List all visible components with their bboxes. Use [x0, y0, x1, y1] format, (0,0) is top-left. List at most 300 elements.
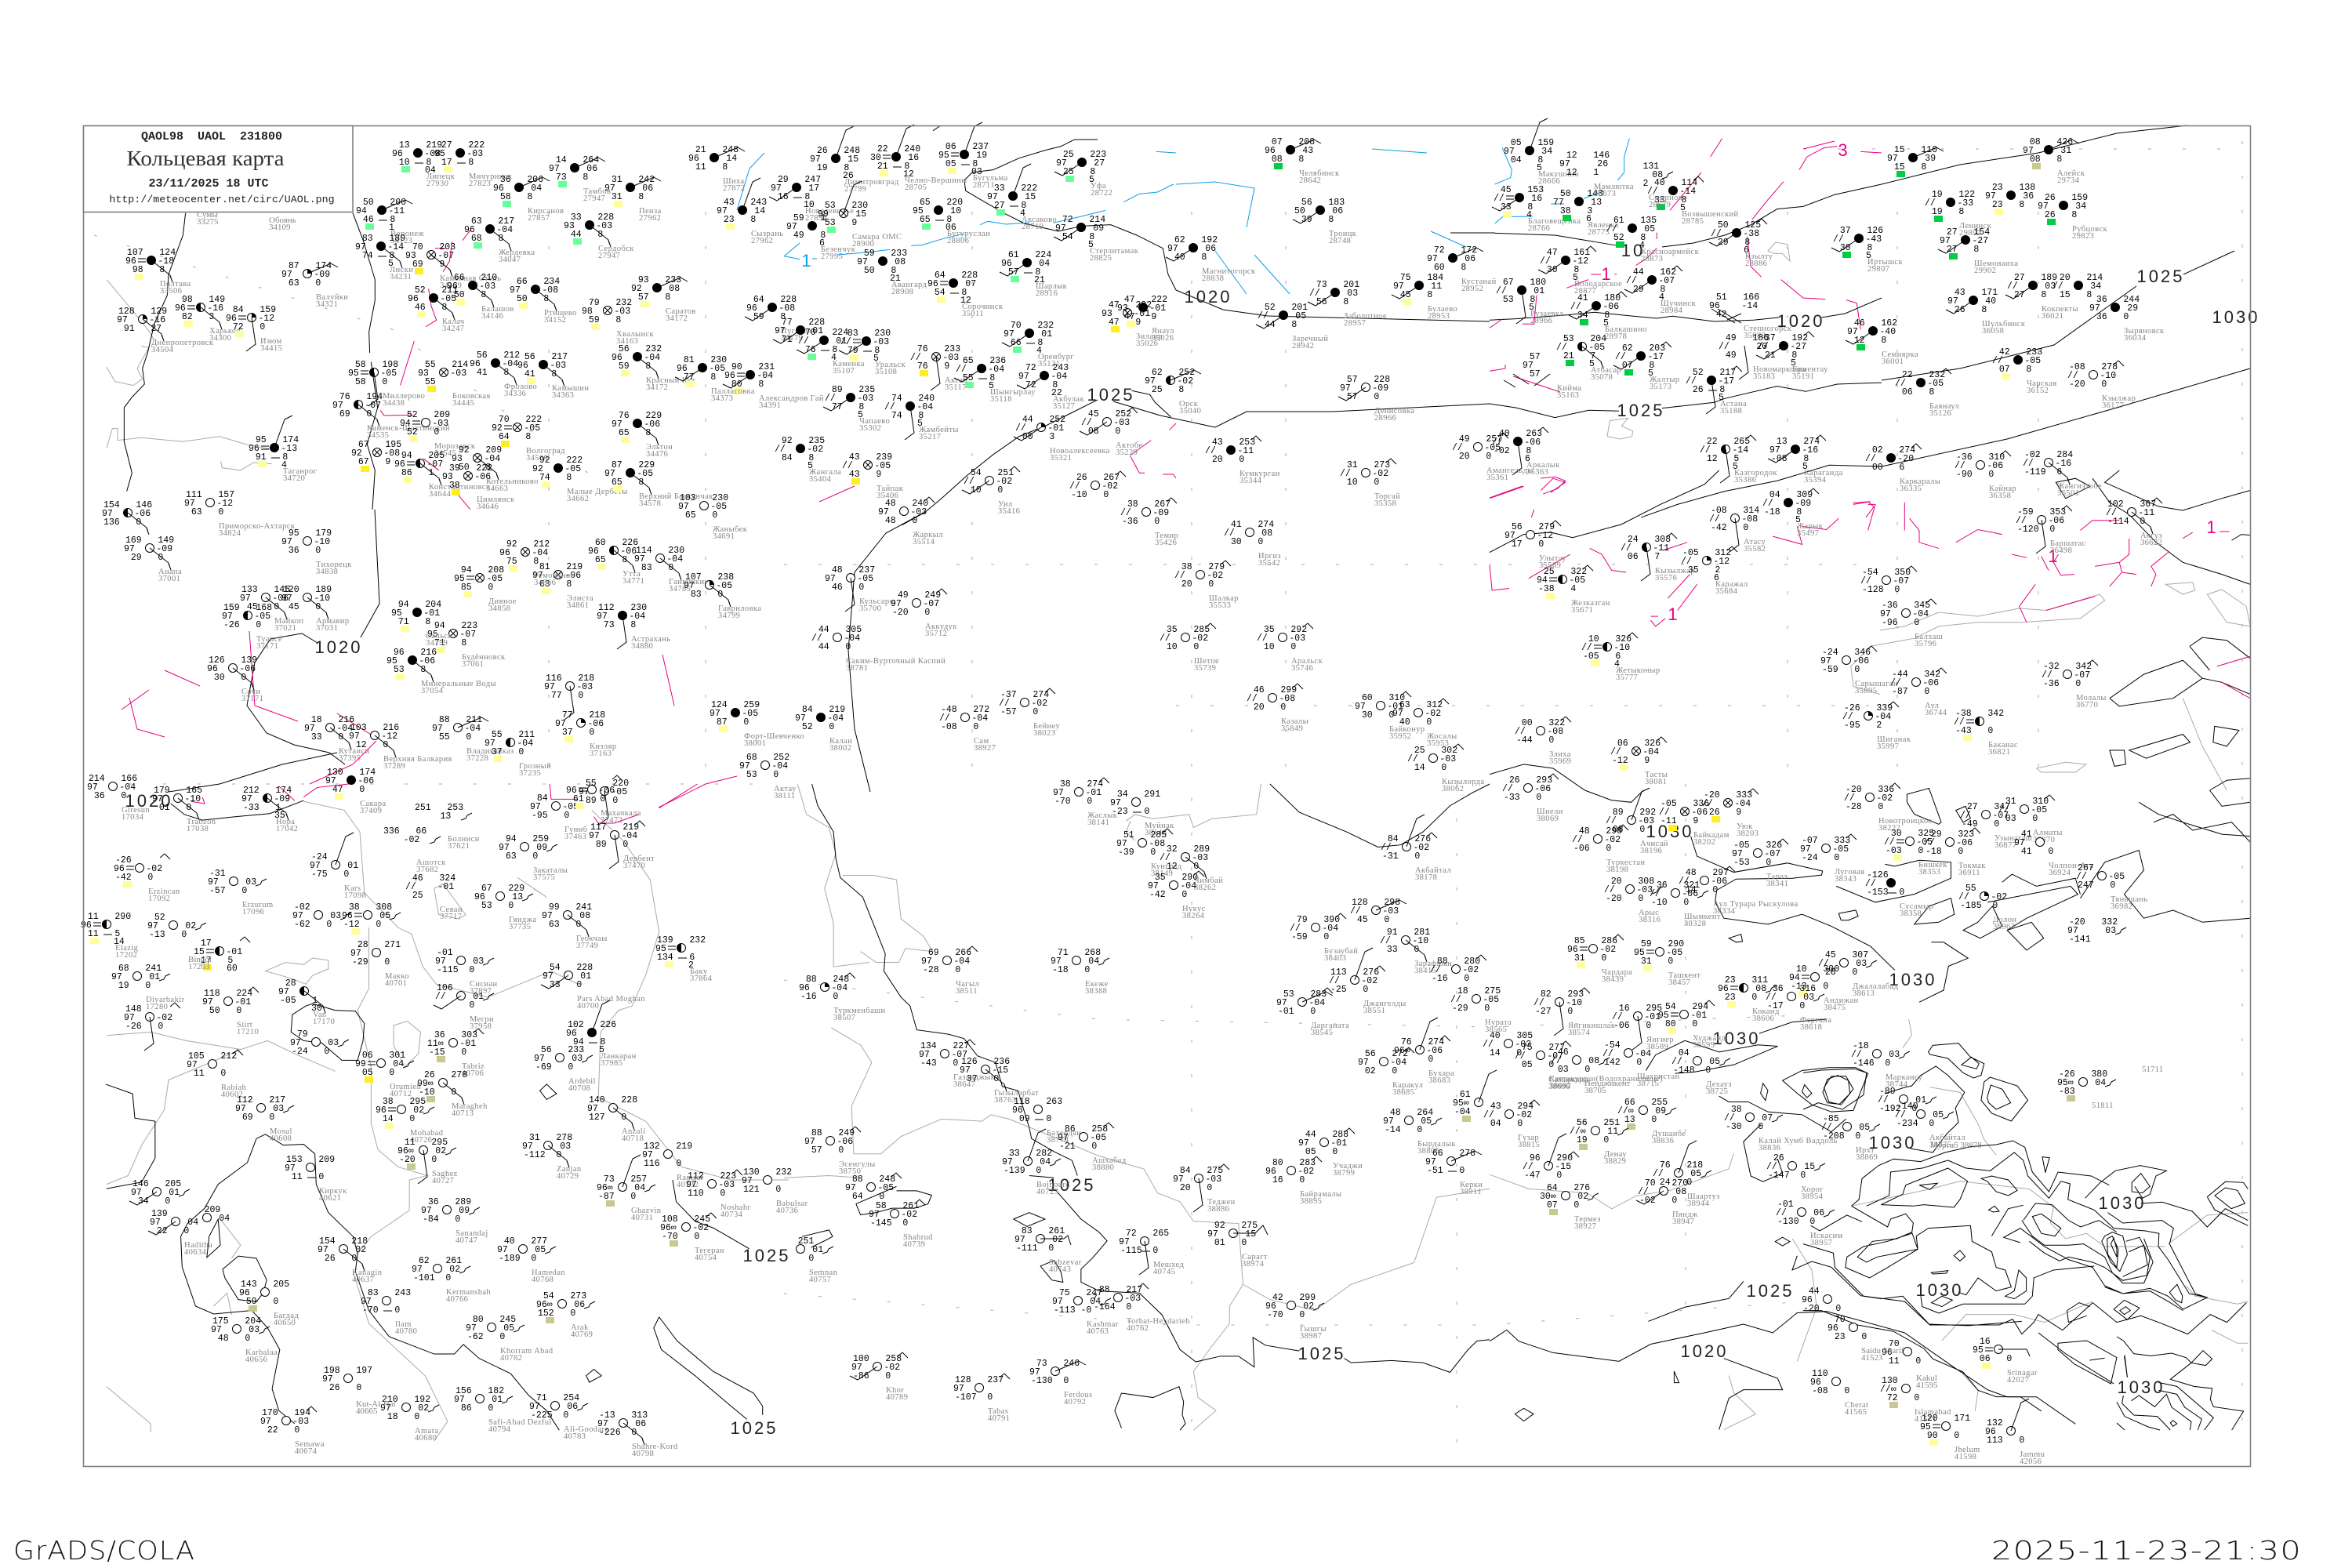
Изюм: Изюм	[260, 337, 282, 346]
Троицк: Троицк	[1329, 230, 1357, 238]
Тараз: 97 -07	[1732, 849, 1780, 859]
Байрамалы: 38895	[1300, 1197, 1322, 1206]
Рузаевка	[1496, 278, 1563, 325]
Шымкент: -10 0	[1651, 898, 1689, 908]
Туапсе: 97 -05	[222, 612, 270, 622]
Ертис: Ленинск	[1959, 222, 1992, 230]
Морозовск: 52 209	[401, 410, 450, 420]
Форт-Шевченко: 38001	[744, 739, 766, 748]
Байкадам: -05 336	[1661, 799, 1709, 809]
Зилаир: 47 9	[1103, 318, 1141, 328]
Ахалцихе: 336 66	[383, 826, 426, 837]
Казгородок	[1700, 435, 1777, 485]
Кизляр 2: 37163	[590, 750, 612, 758]
Pars Abad Moghan	[541, 963, 645, 1011]
Шынгырлау: // -04	[956, 365, 1004, 375]
Таганрог: 95 174	[250, 435, 299, 445]
Фергана	[1766, 984, 1831, 1032]
Иргиз: 35542	[1258, 559, 1280, 568]
Ghazvin: -87 0	[598, 1192, 636, 1202]
Ащысай: Шетпе	[1194, 657, 1219, 666]
Дивное: 34858	[488, 604, 510, 613]
Геокчаы: 37749	[576, 942, 598, 950]
Аркалык: 35363	[1526, 468, 1548, 477]
Rabiah: 11 0	[188, 1069, 226, 1079]
Чагыл: 97 -04	[921, 956, 970, 967]
Каттакурган: 05 0	[1516, 1060, 1554, 1070]
Жарык: // -09	[1762, 499, 1811, 509]
Яна-Сай: 57 228	[1341, 375, 1390, 385]
Ерментау: 5	[1791, 358, 1796, 368]
isotherm and isobar value labels: 1020	[1777, 311, 1824, 331]
Нурата: // -03	[1483, 1040, 1531, 1050]
Макко: 97	[350, 949, 361, 959]
Туапсе: -26 0	[223, 620, 261, 630]
Кулунда: 23 8	[1987, 200, 2024, 210]
Бакты: 22 232	[1896, 370, 1945, 380]
Pars Abad Moghan: Pars Abad Moghan	[577, 995, 645, 1004]
Жезказган	[1537, 565, 1610, 615]
Пенджикент: 41595	[1916, 1381, 1938, 1390]
Чимбай: Чимбай	[1194, 877, 1223, 885]
Жалтыр: 07 8	[1617, 361, 1654, 371]
Эсенгулы: Эсенгулы	[839, 1160, 876, 1169]
isotherm and isobar value labels: 1025	[1617, 401, 1664, 420]
Kermanshah	[412, 1256, 491, 1304]
Кызылжар: // -11	[1621, 543, 1669, 554]
Семей	[1938, 227, 2018, 275]
Кирсанов: 96 04	[493, 183, 542, 194]
Новоалексеевка: 35321	[1050, 454, 1072, 463]
Jhelum	[1920, 1414, 1980, 1461]
Сисиан: -115 0	[437, 965, 474, 975]
Магнитогорск: Магнитогорск	[1202, 267, 1256, 276]
Khor: 100 258	[853, 1354, 902, 1364]
Гюмри: 96 05	[342, 911, 390, 921]
Шар 2: 36501	[2057, 489, 2079, 498]
Туапсе: 159 168	[223, 603, 272, 613]
Ганюшкино: 97 -05	[678, 502, 727, 512]
Морозовск: Морозовск	[434, 442, 476, 451]
Джангелды: 113 276	[1330, 967, 1379, 978]
Каменск-Шахтинский: 34535	[367, 431, 389, 440]
Яна-Сай: 28966	[1374, 414, 1396, 423]
Красноармейск: // 05	[1606, 224, 1655, 234]
isotherm and isobar value labels: 1	[1601, 264, 1613, 284]
Сусамыр: 38358	[1900, 909, 1922, 918]
Изюм: 96 -12	[226, 314, 274, 324]
Дехауз: -148 0	[1673, 1065, 1711, 1076]
Jhelum: 90 0	[1922, 1431, 1959, 1441]
Hopa: 17042	[276, 825, 298, 833]
Утта: 60 226	[590, 538, 638, 548]
Зарафшан: // -10	[1380, 936, 1428, 946]
Pars Abad Moghan: 33 0	[544, 980, 582, 990]
Саратов: 92 08	[631, 284, 680, 294]
Жалтыр: 5	[1648, 368, 1653, 379]
Зайсан: 15 8	[2054, 290, 2092, 300]
Екеже: Екеже	[1085, 980, 1109, 989]
Валуйки: 87 174	[283, 261, 332, 271]
Заболотное: 56 8	[1311, 297, 1348, 307]
Torbat-Heydarieh: -164 0	[1094, 1302, 1131, 1312]
Красный Кут: 59 8	[613, 361, 651, 372]
Semnan: 251	[776, 1236, 814, 1247]
Гузар: Гузар	[1518, 1134, 1539, 1142]
Константиновск: 94 205	[396, 451, 445, 461]
Ейск: 154 146	[103, 500, 152, 510]
Сусамыр: //	[1865, 879, 1876, 889]
Акбулак: 97 -04	[1018, 372, 1067, 382]
Лиски: 83 189	[357, 234, 405, 244]
Магнитогорск: 62 192	[1169, 235, 1218, 245]
Сарышаган	[1820, 646, 1898, 695]
Кустанай: 97 06	[1427, 254, 1475, 264]
Шиели: 38069	[1537, 815, 1559, 823]
Щучинск	[1624, 266, 1697, 315]
Жангала: 5	[808, 461, 813, 471]
Кирсанов: 36 206	[495, 175, 543, 185]
Узынагаш	[1960, 802, 2032, 850]
Димитровград: 97 15	[810, 154, 858, 165]
Эсенгулы: 38750	[839, 1167, 861, 1176]
Фергана: Фергана	[1800, 1016, 1831, 1025]
Аральск: 10 0	[1258, 642, 1296, 652]
Cizre: 79	[292, 1029, 308, 1040]
Балкашино: 28978	[1605, 332, 1627, 341]
Mohabad: 38 295	[377, 1097, 426, 1107]
Долон	[1958, 884, 2016, 931]
Дехауз: 04	[1673, 1048, 1690, 1058]
Diyarbakir: 17280	[146, 1003, 168, 1011]
Шарлык: Шарлык	[1036, 282, 1068, 291]
Степное: 36001	[1882, 358, 1904, 366]
Сызрань: Сызрань	[751, 230, 783, 238]
Пенза	[604, 175, 662, 223]
Новомарковка: 49	[1720, 350, 1737, 361]
Щучинск: 28984	[1661, 307, 1683, 315]
Шиганак: -95 2	[1844, 720, 1882, 731]
Душанбе: 66 255	[1619, 1098, 1668, 1108]
Пенза: Пенза	[639, 207, 662, 216]
Babulsar	[742, 1167, 808, 1215]
Orumieh: Orumieh	[390, 1083, 421, 1091]
isotherm lines (magenta)	[122, 139, 2250, 823]
Гурджаани: 94 259	[500, 834, 549, 844]
Обоянь, Сумы: Обоянь	[269, 216, 296, 225]
Термез: 07 0	[1541, 1200, 1579, 1210]
Теджен: Теджен	[1207, 1198, 1236, 1207]
Челябинск: 96 43	[1265, 146, 1313, 156]
Ланкаран: 37985	[601, 1059, 622, 1068]
Алматы: 03 0	[2000, 814, 2038, 824]
Ташкент	[1634, 939, 1700, 987]
Уюк	[1702, 789, 1759, 838]
Ardebil: 97 03	[534, 1054, 583, 1064]
Муйнак: 97	[1110, 798, 1121, 808]
Жамбейты: 5	[917, 419, 923, 429]
Полтава: 33506	[160, 287, 182, 296]
Аксай: 35117	[945, 383, 967, 392]
Фролово	[470, 350, 537, 398]
Сальск: Сальск	[426, 632, 452, 641]
Hopa: 212 174	[243, 786, 292, 796]
Шиганак	[1842, 702, 1911, 751]
Троицк: 39 8	[1296, 215, 1334, 225]
Шымкент: // -06	[1650, 889, 1698, 899]
Бухара	[1394, 1018, 1454, 1085]
Самара ОМС: Самара ОМС	[852, 233, 902, 241]
Харьков	[175, 295, 241, 343]
Улытау: 35569	[1539, 561, 1561, 570]
Каспий: 44 305	[813, 625, 862, 635]
Чимбай	[1160, 844, 1223, 892]
Бакты	[1895, 368, 1959, 418]
Джангелды: Джангелды	[1363, 1000, 1406, 1008]
Эсенгулы: 57 0	[806, 1145, 844, 1156]
Каменск-Шахтинский: Каменск-Шахтинский	[367, 424, 450, 433]
Maragheh	[417, 1070, 488, 1118]
Володарское: // -12	[1540, 256, 1588, 267]
Изюм	[226, 305, 282, 353]
Бугуруслан: 65 220	[914, 198, 963, 208]
Пенза: 31 8	[606, 192, 644, 202]
Сисиан: 97 03	[435, 956, 484, 967]
Чагыл: 69 266	[923, 948, 971, 958]
Кийма: 97	[1523, 361, 1534, 371]
Jammu: 42056	[2020, 1457, 2042, 1466]
Костанай	[1392, 273, 1457, 321]
Ремонтное: 96 -04	[499, 548, 548, 558]
Красноармейск: 61 135	[1608, 216, 1657, 226]
Токмак: 29 323	[1926, 829, 1974, 840]
Бугульма: 95 19	[938, 151, 987, 161]
Узынагаш: Узынагаш	[1994, 834, 2032, 843]
Чилик: 97	[2014, 838, 2025, 848]
Tabriz: 11∞ -01	[427, 1039, 476, 1049]
Пенза: 97 06	[604, 183, 653, 194]
Худжанд: 95 -01	[1658, 1011, 1707, 1021]
Аул: // -06	[1890, 678, 1939, 688]
Bojnourd: -139 0	[1004, 1166, 1041, 1176]
Anzali: 40718	[622, 1134, 644, 1143]
Гузар: 38815	[1518, 1141, 1540, 1149]
Караганда: 13 274	[1771, 437, 1820, 447]
Астана: 35188	[1720, 407, 1742, 416]
Макушино: Макушино	[1538, 170, 1579, 179]
Haditha	[148, 1209, 212, 1257]
Ахалцихе: 37682	[416, 866, 438, 874]
Аксаково: 33 222	[989, 183, 1037, 194]
Баканас: -38 342	[1955, 709, 2004, 719]
Авангард: 50 8	[858, 266, 896, 276]
Mosul south: 34 0	[132, 1196, 170, 1207]
Георгиевск: Верхняя Балкария	[383, 755, 452, 764]
Кустанай: Кустанай	[1461, 278, 1497, 286]
Tabriz: Tabriz	[462, 1062, 485, 1071]
Noshahr: 110 0	[688, 1189, 725, 1199]
Балкашино: 34 8	[1572, 310, 1610, 321]
Новоалексеевка: 00 3	[1017, 432, 1054, 442]
Тайпак: 35406	[877, 492, 898, 500]
Бакты: Баянаул	[1929, 402, 1959, 411]
Воронеж: 50 200	[358, 198, 406, 208]
Сорочинск	[927, 270, 1004, 318]
Пенджикент: 38705	[1584, 1086, 1606, 1095]
Пяндж: Пяндж	[1672, 1210, 1698, 1219]
Аул	[1890, 668, 1947, 717]
Ali-Goodarz: -225 0	[531, 1410, 568, 1421]
Пенджикент: 38696	[1548, 1082, 1570, 1091]
isotherm and isobar value labels: 3	[1838, 140, 1850, 160]
Siirt: 97 -01	[202, 997, 251, 1007]
Уфа: 5	[1089, 175, 1094, 185]
Cherat: 41565	[1845, 1408, 1867, 1417]
Сальск: 34759	[426, 639, 448, 648]
Рузаевка: 28966	[1530, 317, 1552, 325]
Пенджикент: Kakul	[1916, 1374, 1937, 1383]
Elazig: 17202	[115, 951, 137, 960]
Кунград: 38149	[1151, 869, 1173, 878]
Калай Хумб: Калай Хумб Ваддоль	[1759, 1137, 1838, 1145]
Ferdous: 73 246	[1031, 1359, 1080, 1369]
Ащысай: 35739	[1194, 664, 1216, 673]
Каркаралы: 02 274	[1867, 445, 1915, 456]
Rasht: 40732	[677, 1181, 699, 1189]
Заречный	[1256, 303, 1328, 350]
Чагыл: -28 0	[923, 965, 960, 975]
Уральск: 35108	[875, 368, 897, 376]
header code line: QAOL98 UAOL 231800	[141, 130, 282, 143]
Жетыконыр: Жетыконыр	[1616, 666, 1661, 675]
Arak: 152 0	[538, 1308, 575, 1319]
Днепропетровск: 97 -16	[117, 315, 165, 325]
Краснодар: 37021	[274, 624, 296, 633]
Каражал: // -12	[1681, 557, 1730, 567]
Ртищево: 50 8	[511, 294, 549, 304]
Термез: Термез	[1574, 1215, 1601, 1224]
Заболотное	[1308, 280, 1387, 328]
Шарлык	[1000, 250, 1068, 298]
Новомарковка: Новомарковка	[1753, 365, 1806, 374]
Хвалынск: 59 8	[583, 315, 621, 325]
Баку	[655, 935, 713, 983]
stations: north-west (Ukraine, Don, Volga)	[102, 140, 824, 825]
Noshahr: Noshahr	[720, 1203, 750, 1212]
Грозный: 55 211	[486, 730, 535, 740]
Новотроицкое: Новотроицкое	[1878, 817, 1933, 826]
Екеже: 97 04	[1051, 956, 1099, 967]
Фролово: 56 212	[471, 350, 520, 361]
Tabas: Tabas	[988, 1407, 1008, 1416]
Мешхед: Мешхед	[1153, 1261, 1184, 1269]
Новотроицкое: -28 0	[1846, 802, 1883, 812]
Zanjan	[522, 1133, 582, 1181]
Армавир: 45 0	[283, 602, 321, 612]
Муйнак: 38146	[1145, 829, 1167, 837]
Бабиево: 30 0	[1356, 710, 1394, 720]
Ardebil: Ardebil	[568, 1077, 596, 1086]
Hopa: 97 -09	[241, 794, 290, 804]
Жетыконыр: // -10	[1581, 643, 1630, 653]
Mohabad: Mohabad	[410, 1129, 444, 1138]
Макушино: 05 159	[1505, 138, 1554, 148]
Ferdous	[1029, 1359, 1093, 1406]
Аул: -44 342	[1892, 670, 1940, 680]
Каспий	[811, 625, 946, 673]
Янаул: 35026	[1152, 334, 1174, 343]
Косшагыл	[891, 589, 957, 638]
Амангельды	[1452, 433, 1534, 482]
Srinagar: 42027	[2007, 1376, 2029, 1385]
Жамбейты: Жамбейты	[919, 426, 959, 434]
Янгиер: -06 0	[1613, 1021, 1651, 1031]
Маркансу: -18	[1853, 1041, 1869, 1051]
Новоалексеевка: 44 252	[1017, 415, 1065, 425]
Пролетарск: 67 9	[353, 457, 390, 467]
Фергана: // 03	[1766, 993, 1814, 1003]
Самара ОМС	[818, 181, 902, 249]
Diyarbakir: Diyarbakir	[146, 996, 185, 1004]
Душанбе: 13 0	[1619, 1115, 1657, 1125]
Уил: 35416	[998, 507, 1020, 516]
Екеже: -18 0	[1052, 965, 1090, 975]
Rasht: 132 219	[644, 1142, 692, 1152]
Пяндж: 38947	[1672, 1218, 1694, 1226]
Gorgan: 97 -05	[845, 1183, 894, 1193]
Атасу: // -08	[1709, 514, 1758, 524]
Ганюшкино: 103 230	[680, 493, 728, 503]
Красноармейск: 4	[1639, 241, 1645, 251]
Тасты: Тасты	[1645, 771, 1668, 779]
Кзылту: Кзылту	[1745, 252, 1773, 261]
Гышгы: 42 299	[1267, 1293, 1316, 1303]
Ахурян: 97 03	[292, 911, 341, 921]
Khor: -86 0	[853, 1371, 891, 1381]
Ташкент: 38457	[1668, 978, 1690, 987]
Акбайтал 38178	[1381, 815, 1451, 882]
Elazig: 11 5	[82, 929, 120, 939]
Шынгырлау: 5	[989, 381, 994, 391]
Тасты: // -04	[1610, 747, 1659, 757]
Актобе: Актобе	[1116, 441, 1143, 450]
Сам: -48 272	[941, 705, 989, 715]
Зыряновск: Зыряновск	[2124, 327, 2165, 336]
Saghez: 96∞ 02	[397, 1146, 446, 1156]
Актобе: 35229	[1116, 448, 1138, 457]
Полтава: 96 -18	[125, 256, 174, 267]
Каркаралы	[1865, 444, 1940, 493]
Noshahr: 40734	[720, 1210, 743, 1219]
Зыряновск: 36034	[2124, 334, 2147, 343]
Бишкек: -03 0	[1886, 846, 1923, 856]
Волгоград: 70 222	[493, 415, 542, 425]
stations: north-east (Kazakhstan north)	[1492, 118, 2165, 538]
Ганюшкино 2: 97 -04	[634, 554, 683, 564]
Искасим: Искасим	[1810, 1232, 1843, 1240]
Шаартуз 2: 61	[1454, 1090, 1471, 1100]
Ерментау: 35191	[1792, 372, 1814, 381]
Зилаир: 35026	[1136, 339, 1158, 348]
Будённовск: 95 -07	[427, 630, 476, 640]
Sabzevar: 97 02	[1014, 1235, 1063, 1245]
Севан: 37717	[440, 913, 462, 921]
Луговая: -07 333	[1802, 836, 1850, 846]
Каркаралы: 36335	[1900, 485, 1922, 493]
Темир 35426	[1120, 498, 1178, 547]
Ремонтное	[499, 539, 575, 587]
Giresun: 36 0	[89, 791, 126, 801]
